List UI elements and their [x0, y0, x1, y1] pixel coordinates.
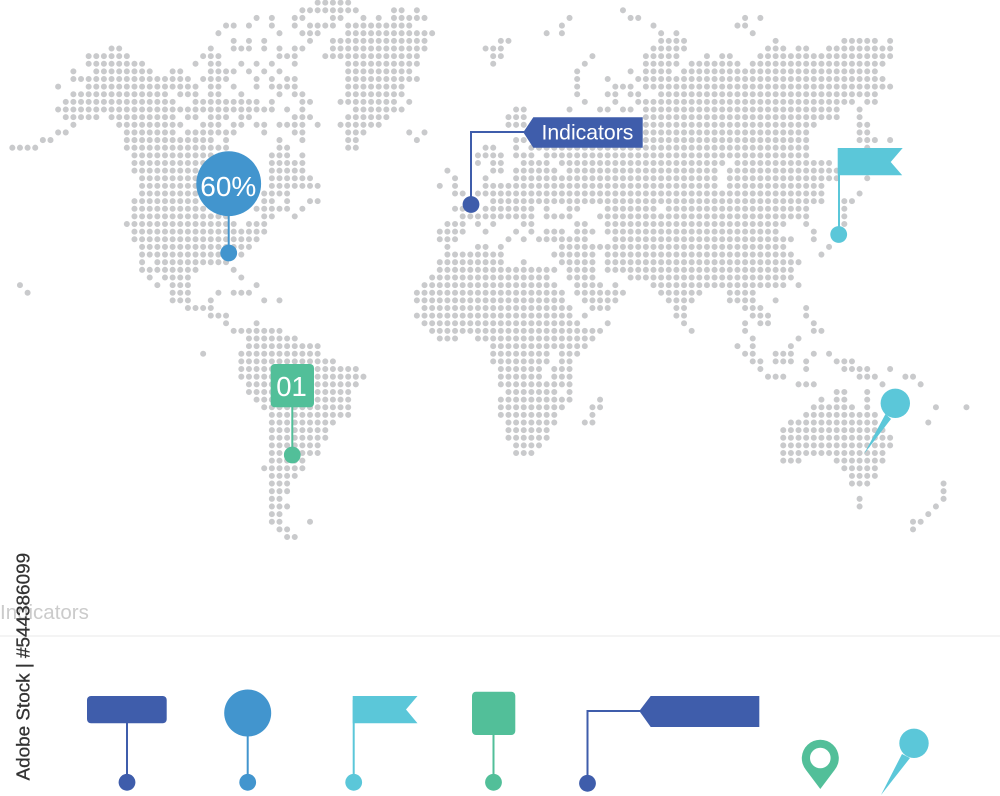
section label: Indicators: Indicators [0, 601, 89, 624]
marker: flag [830, 148, 903, 243]
marker: Indicators callout: Indicators [542, 122, 633, 144]
marker: 60% circle: 60% [200, 171, 256, 202]
icon: square indicator [472, 692, 515, 791]
icon: callout indicator [579, 696, 759, 792]
icon: rounded rectangle indicator [87, 696, 167, 791]
marker: 01 square [271, 364, 314, 463]
divider line [0, 636, 1000, 637]
stock id vertical text: Adobe Stock | #544386099 [14, 553, 34, 780]
marker: Indicators callout [463, 117, 643, 213]
dotted world map [12, 3, 967, 537]
marker: 60% circle [196, 151, 261, 261]
marker: map pin on Australia [864, 389, 910, 454]
icon: location pin [802, 740, 839, 789]
icon: flag indicator [345, 696, 418, 791]
icon: circle indicator [224, 690, 271, 791]
icon: push pin [881, 729, 929, 795]
marker: 01 square: 01 [276, 371, 307, 402]
